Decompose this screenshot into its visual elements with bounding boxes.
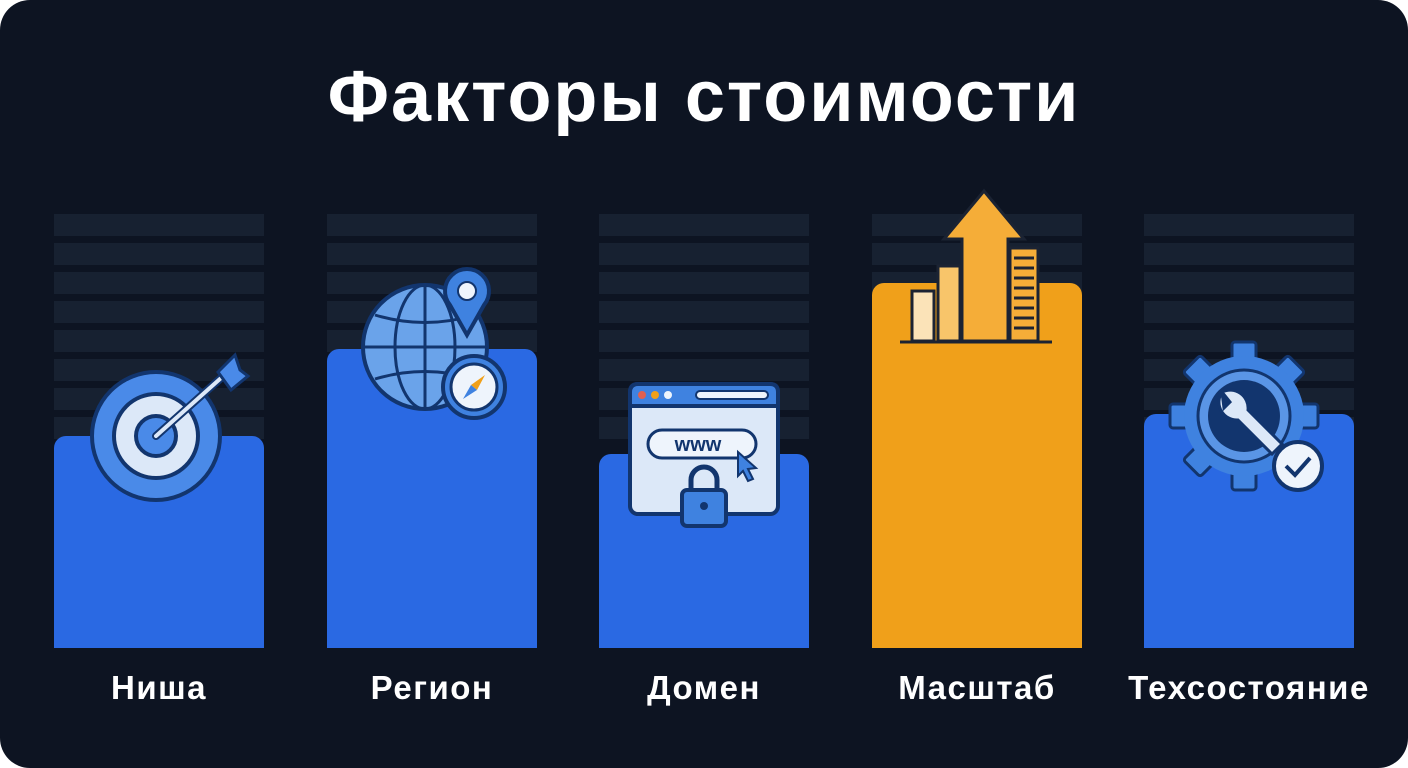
bar: Ниша [54, 436, 264, 648]
icon: browser www with lock [628, 382, 780, 528]
icon: browser www with lock: www [674, 434, 722, 456]
column: Регион [327, 214, 537, 648]
icon: growth chart with arrow [900, 189, 1052, 344]
label: Ниша: Ниша [111, 669, 207, 706]
icon: target [90, 352, 250, 502]
label: Техсостояние: Техсостояние [1128, 669, 1370, 706]
column: Техсостояние [1144, 214, 1354, 648]
bar: Регион [327, 349, 537, 648]
label: Масштаб: Масштаб [898, 669, 1056, 706]
label: Домен: Домен [647, 669, 761, 706]
title: Факторы стоимости [328, 57, 1080, 137]
column: Домен [599, 214, 809, 648]
bar: Домен [599, 454, 809, 648]
column: Ниша [54, 214, 264, 648]
icon: gear with wrench and check [1168, 340, 1324, 492]
bar: Техсостояние [1144, 414, 1354, 648]
label: Регион: Регион [371, 669, 493, 706]
icon: globe with pin and compass [361, 267, 507, 420]
bar: Масштаб [872, 283, 1082, 648]
column: Масштаб [872, 214, 1082, 648]
